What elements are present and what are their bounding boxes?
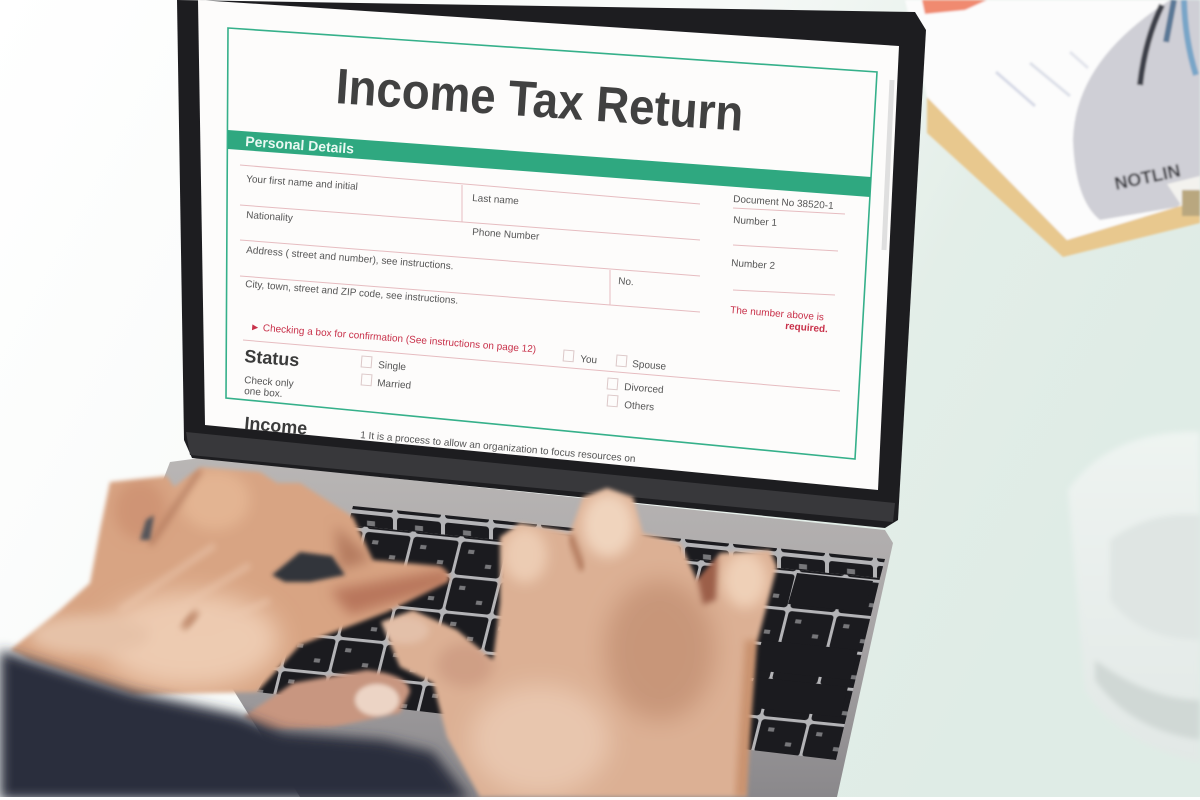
right hand	[381, 488, 777, 797]
keyboard	[257, 506, 885, 760]
personal details band	[228, 130, 871, 197]
screen scrollbar	[884, 80, 892, 250]
income section: Income	[244, 413, 308, 438]
status section: You	[580, 354, 597, 366]
form rows: ► Checking a box for confirmation (See instructions on page 12)	[250, 322, 536, 355]
personal details band: Personal Details	[245, 133, 355, 157]
form rows: Last name	[472, 193, 520, 207]
bottom edge strip	[0, 797, 1200, 800]
status section: one box.	[244, 386, 283, 400]
sleeve	[0, 650, 470, 800]
status section: Divorced	[624, 382, 664, 396]
status section: Single	[378, 360, 407, 373]
keys seen between left-hand fingers	[140, 515, 345, 582]
form rows: City, town, street and ZIP code, see instructions.	[245, 279, 459, 307]
form rows: The number above is	[730, 305, 824, 323]
clipboard with papers: NOTLIN	[1113, 160, 1182, 194]
status section: Check only	[244, 375, 294, 390]
thumb nail	[355, 684, 399, 716]
form rows: required.	[785, 321, 829, 335]
form rows: Nationality	[246, 210, 293, 224]
form rows	[240, 165, 845, 391]
form rows: Number 2	[731, 258, 776, 272]
function key row	[348, 506, 885, 578]
status section: Married	[377, 378, 411, 392]
form rows: Document No 38520-1	[733, 194, 834, 212]
form rows: Phone Number	[472, 227, 540, 243]
left thumb	[243, 670, 410, 730]
status section: Spouse	[632, 359, 667, 373]
income section	[244, 413, 636, 465]
title: Income Tax Return	[334, 58, 745, 142]
drinking glass	[1068, 432, 1200, 762]
form rows: Number 1	[733, 215, 778, 229]
status section: Status	[244, 346, 300, 370]
laptop screen with form	[198, 0, 899, 490]
status section: Others	[624, 400, 655, 413]
form border	[226, 28, 877, 459]
form rows: No.	[618, 276, 634, 288]
status section	[244, 346, 667, 413]
wide keys on right side	[746, 573, 873, 717]
form rows: Your first name and initial	[246, 174, 358, 193]
laptop lid and bezel	[177, 0, 926, 528]
form rows: Address ( street and number), see instructions.	[246, 245, 454, 272]
clipboard with papers	[905, 0, 1200, 257]
left hand	[10, 467, 450, 695]
income section: 1 It is a process to allow an organization to focus resources on	[360, 430, 636, 465]
laptop base	[140, 458, 893, 797]
